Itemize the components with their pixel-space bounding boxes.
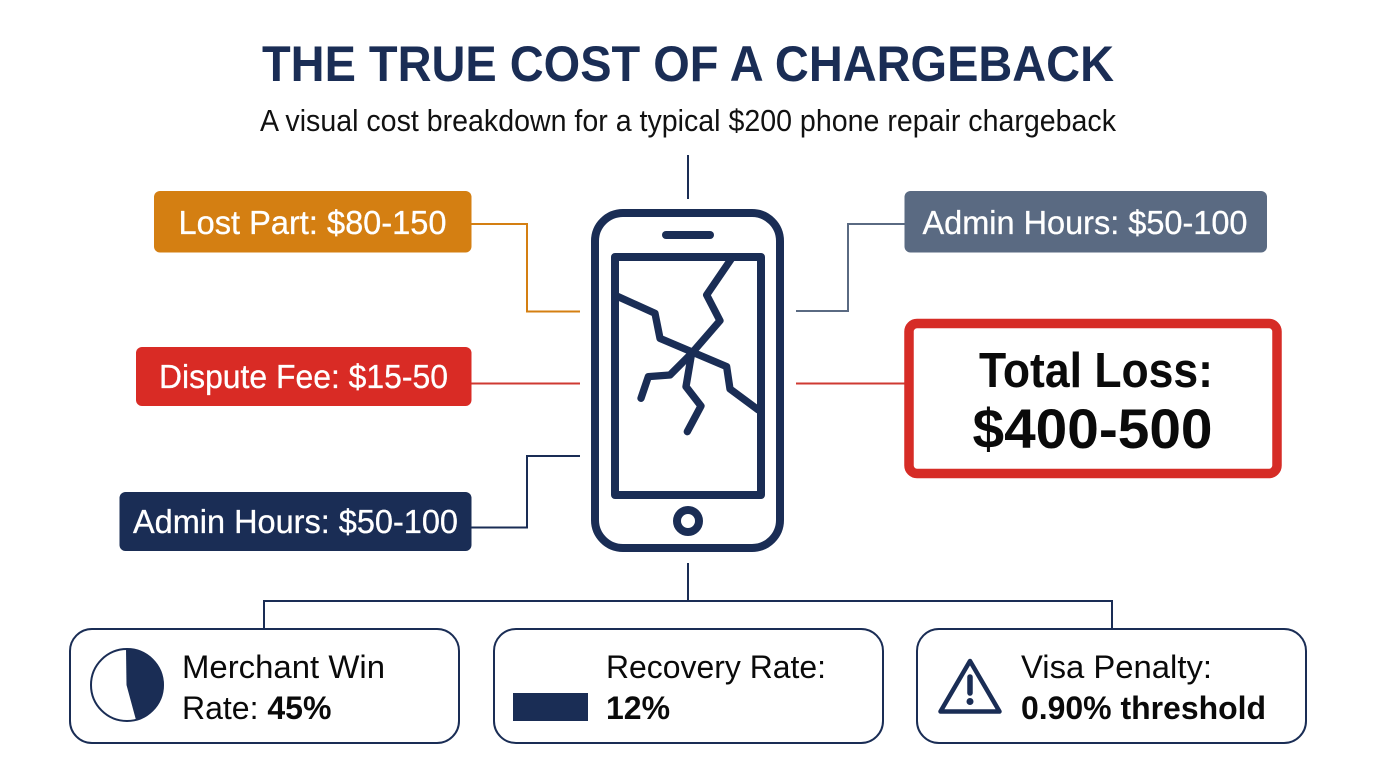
label: lost part: [154, 191, 472, 252]
label: admin hours left: Admin Hours: $50-100: [133, 503, 458, 540]
subtitle: A visual cost breakdown for a typical $200 phone repair chargeback: [260, 103, 1116, 138]
connector: admin hours right: [796, 224, 905, 311]
icon: cracked phone: [595, 213, 780, 548]
label: dispute fee: Dispute Fee: $15-50: [159, 358, 448, 395]
callout: total loss: $400-500: [972, 397, 1212, 460]
text: visa penalty: 0.90% threshold: [1021, 690, 1266, 726]
connector: top stub: [687, 155, 689, 199]
connector: total loss: [796, 382, 905, 384]
text: merchant win rate: Rate: 45%: [182, 690, 331, 726]
text: recovery rate: 12%: [606, 690, 670, 726]
icon: bar: [513, 693, 588, 721]
label: admin hours left: [120, 492, 472, 551]
label: dispute fee: [136, 347, 472, 406]
text: recovery rate: Recovery Rate:: [606, 649, 826, 685]
callout: total loss: [909, 324, 1277, 474]
connector: lost part: [471, 224, 580, 312]
label: lost part: Lost Part: $80-150: [178, 204, 446, 241]
icon: pie chart: [91, 649, 164, 721]
text: visa penalty: Visa Penalty:: [1021, 649, 1212, 685]
connector: dispute fee: [471, 382, 580, 384]
label: admin hours right: Admin Hours: $50-100: [922, 204, 1248, 241]
card: visa penalty: [917, 629, 1306, 743]
label: admin hours right: [904, 191, 1267, 252]
text: merchant win rate: Merchant Win: [182, 649, 385, 685]
connector: bottom tree: [264, 563, 1112, 629]
connector: admin hours left: [471, 456, 580, 528]
card: merchant win rate: [70, 629, 459, 743]
title: THE TRUE COST OF A CHARGEBACK: [262, 36, 1114, 92]
icon: warning triangle: [940, 661, 1000, 712]
card: recovery rate: [494, 629, 883, 743]
callout: total loss: Total Loss:: [979, 344, 1213, 398]
